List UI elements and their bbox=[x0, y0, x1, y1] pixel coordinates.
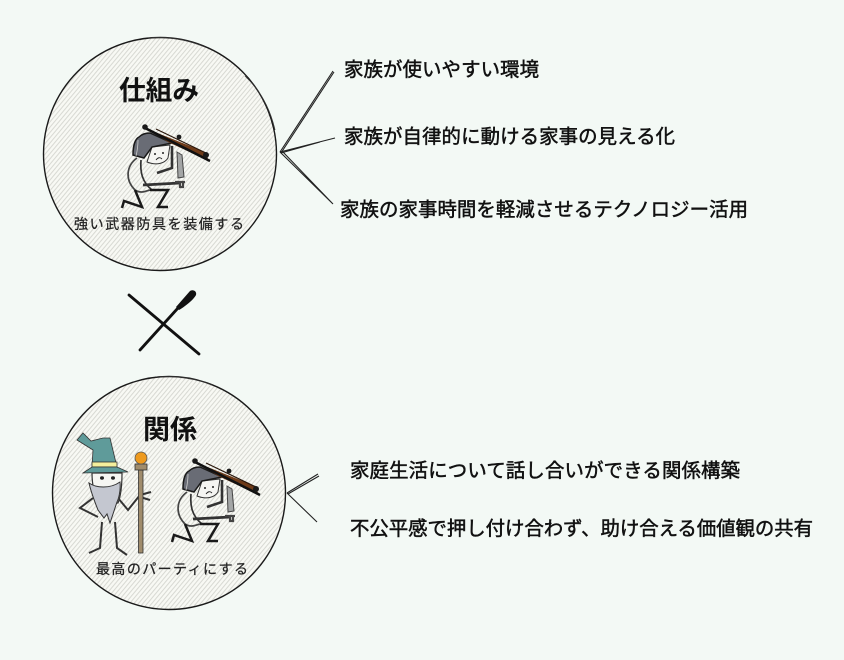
text: 仕組み item 1: 家族が使いやすい環境 bbox=[344, 59, 539, 81]
arrow: lines from 仕組み to list bbox=[280, 71, 335, 204]
heading: 仕組み: 仕組み bbox=[119, 76, 199, 106]
caption: 強い武器防具を装備する: 強い武器防具を装備する bbox=[74, 216, 244, 232]
icon: knight with shield bbox=[122, 124, 210, 208]
icon: wizard with staff bbox=[77, 433, 151, 555]
icon: knight with shield bbox=[172, 458, 260, 542]
text: 仕組み item 2: 家族が自律的に動ける家事の見える化 bbox=[344, 126, 675, 148]
text: 仕組み item 3: 家族の家事時間を軽減させるテクノロジー活用 bbox=[340, 199, 748, 221]
caption: 最高のパーティにする: 最高のパーティにする bbox=[96, 561, 248, 577]
panel: 関係 circle bbox=[52, 376, 286, 610]
arrow: lines from 関係 to list bbox=[287, 474, 319, 522]
icon: multiply sign bbox=[129, 290, 199, 354]
text: 関係 item 2: 不公平感で押し付け合わず、助け合える価値観の共有 bbox=[350, 518, 813, 540]
panel: 仕組み circle bbox=[44, 37, 276, 270]
heading: 関係: 関係 bbox=[143, 415, 197, 445]
text: 関係 item 1: 家庭生活について話し合いができる関係構築 bbox=[350, 460, 740, 482]
